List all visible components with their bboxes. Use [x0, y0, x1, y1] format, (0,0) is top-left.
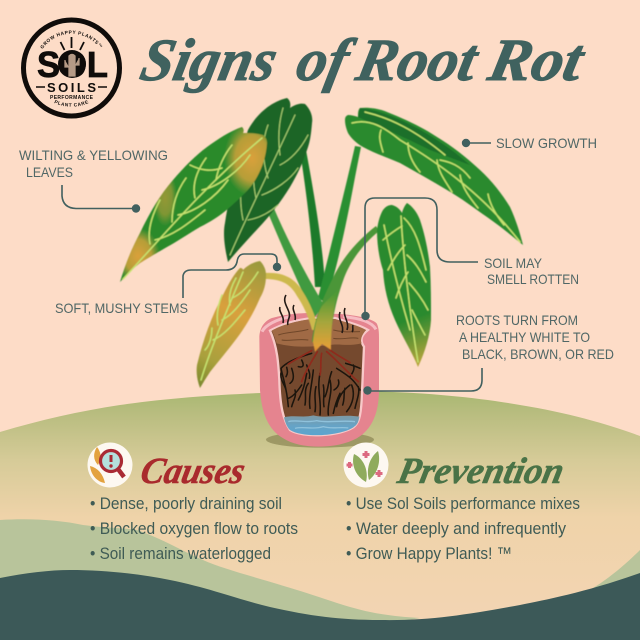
prevention list: • Use Sol Soils performance mixes [346, 494, 580, 513]
callout: roots turn colour: BLACK, BROWN, OR RED [462, 346, 614, 362]
sage wave [0, 519, 420, 640]
prevention list: • Water deeply and infrequently [346, 519, 566, 538]
callout: wilting and yellowing leaves [19, 147, 168, 213]
heading: prevention: Prevention [393, 451, 568, 492]
icon: magnifier with leaves [88, 442, 132, 488]
icon: leaves with sparkles [344, 442, 388, 488]
roots [281, 350, 360, 415]
leaf: dark back leaf [224, 98, 312, 262]
soil [270, 318, 368, 435]
title: Root [350, 28, 485, 94]
ground hill [0, 391, 640, 640]
soil ridges [278, 329, 360, 340]
callout: roots turn colour: A HEALTHY WHITE TO [459, 329, 590, 345]
callout: soil may smell rotten: SMELL ROTTEN [487, 271, 579, 287]
title [135, 28, 591, 94]
causes list: • Soil remains waterlogged [90, 544, 271, 563]
logo: SOILS [47, 80, 96, 95]
callout: slow growth: SLOW GROWTH [496, 135, 597, 151]
callout: wilting and yellowing leaves: LEAVES [26, 164, 73, 180]
water [284, 415, 359, 435]
leaf: right hanging leaf [377, 203, 431, 367]
callout: wilting and yellowing leaves: WILTING & YELLOWING [19, 147, 168, 163]
logo: SOL [37, 44, 108, 85]
plant [116, 98, 523, 388]
stems [255, 124, 379, 352]
callout: soil may smell rotten: SOIL MAY [484, 255, 543, 271]
pot body [259, 313, 379, 447]
steam wisps [280, 295, 353, 333]
dark teal wave [0, 570, 640, 640]
prevention list [346, 494, 580, 563]
logo: PLANT CARE [54, 100, 88, 107]
logo: GROW HAPPY PLANTS™ [40, 30, 102, 48]
causes list: • Dense, poorly draining soil [90, 494, 282, 513]
pot with soil and roots [259, 313, 379, 448]
callout: soft mushy stems [55, 254, 281, 316]
leaf: slow growth leaf [345, 108, 523, 245]
top soil [272, 319, 366, 347]
title: Rot [482, 28, 591, 94]
sage wave right [570, 550, 640, 610]
causes list: • Blocked oxygen flow to roots [90, 519, 298, 538]
title: Signs [135, 28, 283, 94]
callout: soil may smell rotten [361, 198, 579, 320]
logo [21, 18, 122, 118]
leaf: small yellow leaf [197, 261, 266, 388]
title: of [291, 28, 361, 94]
callout: roots turn colour [363, 312, 614, 395]
leaf: wilting yellow leaf [120, 126, 268, 282]
logo: PERFORMANCE [50, 95, 94, 101]
heading: causes: Causes [137, 451, 249, 492]
prevention list: • Grow Happy Plants! ™ [346, 544, 512, 563]
water ripples [288, 421, 355, 428]
causes list [90, 494, 298, 563]
pot shadow [266, 432, 374, 448]
callout: soft mushy stems: SOFT, MUSHY STEMS [55, 300, 188, 316]
callout: roots turn colour: ROOTS TURN FROM [456, 312, 578, 328]
rim highlight [262, 317, 376, 332]
